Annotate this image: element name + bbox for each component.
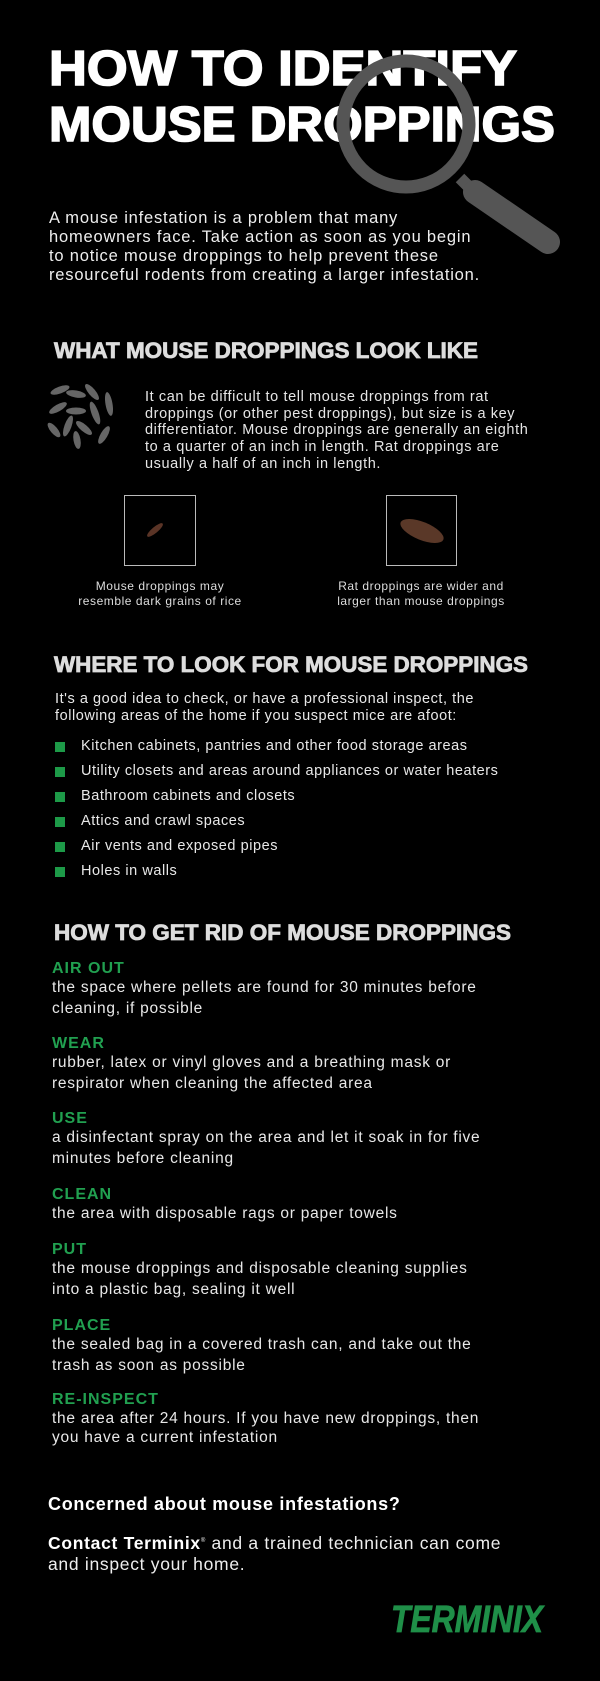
step: air out: the space where pellets are found for 30 minutes before [52, 979, 477, 996]
step: clean: CLEAN [52, 1186, 112, 1203]
step: put: PUT [52, 1241, 87, 1258]
step: clean [52, 1186, 398, 1222]
caption: rat: Rat droppings are wider and [338, 579, 504, 593]
intro paragraph: homeowners face. Take action as soon as you begin [49, 228, 471, 246]
text: size differentiator: droppings (or other pest droppings), but size is a key [145, 406, 515, 422]
intro paragraph: A mouse infestation is a problem that many [49, 209, 398, 227]
step: re-inspect: the area after 24 hours. If you have new droppings, then [52, 1410, 479, 1427]
callout: contact: and inspect your home. [48, 1554, 245, 1574]
caption: mouse [78, 579, 242, 608]
step: use: USE [52, 1110, 88, 1127]
intro: where to look: following areas of the home if you suspect mice are afoot: [55, 708, 457, 724]
step: place: trash as soon as possible [52, 1356, 246, 1374]
intro paragraph: to notice mouse droppings to help prevent these [49, 247, 439, 265]
step: place: the sealed bag in a covered trash can, and take out the [52, 1336, 472, 1353]
step: use [52, 1110, 480, 1166]
caption: mouse: Mouse droppings may [96, 579, 224, 593]
intro: where to look [55, 691, 474, 724]
step: re-inspect [52, 1391, 479, 1446]
text: size differentiator: to a quarter of an inch in length. Rat droppings are [145, 439, 499, 455]
step: air out: cleaning, if possible [52, 1000, 203, 1016]
heading: how to get rid: HOW TO GET RID OF MOUSE DROPPINGS [54, 920, 511, 945]
title: HOW TO IDENTIFY [49, 42, 517, 96]
step: air out [52, 960, 477, 1016]
intro: where to look: It's a good idea to check, or have a professional inspect, the [55, 691, 474, 707]
bullet 1: Kitchen cabinets, pantries and other food storage areas [81, 738, 468, 754]
heading: where to look: WHERE TO LOOK FOR MOUSE DROPPINGS [54, 652, 528, 677]
bullet 5: Air vents and exposed pipes [81, 838, 278, 854]
caption: mouse: resemble dark grains of rice [78, 594, 242, 608]
panel: rat dropping sample [386, 495, 457, 566]
step: wear: WEAR [52, 1035, 105, 1052]
caption: rat: larger than mouse droppings [337, 594, 505, 608]
step: wear: respirator when cleaning the affected area [52, 1074, 373, 1092]
list: areas [55, 738, 498, 879]
step: wear [52, 1035, 451, 1092]
step: place: PLACE [52, 1317, 111, 1334]
step: put: the mouse droppings and disposable cleaning supplies [52, 1260, 468, 1277]
step: clean: the area with disposable rags or paper towels [52, 1205, 398, 1222]
bullet 4: Attics and crawl spaces [81, 813, 245, 829]
step: re-inspect: you have a current infestation [52, 1429, 278, 1446]
step: use: minutes before cleaning [52, 1150, 234, 1166]
text: size differentiator: usually a half of an inch in length. [145, 456, 381, 472]
bullet 3: Bathroom cabinets and closets [81, 788, 295, 804]
step: put [52, 1241, 468, 1298]
step: place [52, 1317, 472, 1374]
callout: contact [48, 1533, 501, 1574]
text: size differentiator: differentiator. Mouse droppings are generally an eighth [145, 422, 528, 438]
intro paragraph [49, 209, 480, 284]
icon: magnifying glass [336, 54, 560, 254]
title [49, 42, 555, 152]
text: size differentiator [145, 389, 528, 472]
step: wear: rubber, latex or vinyl gloves and a breathing mask or [52, 1054, 451, 1071]
step: use: a disinfectant spray on the area and let it soak in for five [52, 1129, 480, 1146]
title: MOUSE DROPPINGS [49, 98, 555, 152]
step: re-inspect: RE-INSPECT [52, 1391, 159, 1408]
text: size differentiator: It can be difficult to tell mouse droppings from rat [145, 389, 489, 405]
bullet 6: Holes in walls [81, 863, 177, 879]
icon: droppings cluster [48, 384, 113, 449]
panel: mouse dropping sample [124, 495, 196, 566]
callout: contact: Contact Terminix® and a trained technician can come [48, 1533, 501, 1553]
bullet 2: Utility closets and areas around appliances or water heaters [81, 763, 498, 779]
intro paragraph: resourceful rodents from creating a larger infestation. [49, 266, 480, 284]
heading: what mouse droppings look like: WHAT MOUSE DROPPINGS LOOK LIKE [54, 338, 478, 363]
callout: concerned: Concerned about mouse infestations? [48, 1494, 401, 1514]
caption: rat [337, 579, 505, 608]
step: put: into a plastic bag, sealing it well [52, 1280, 295, 1298]
step: air out: AIR OUT [52, 960, 125, 977]
